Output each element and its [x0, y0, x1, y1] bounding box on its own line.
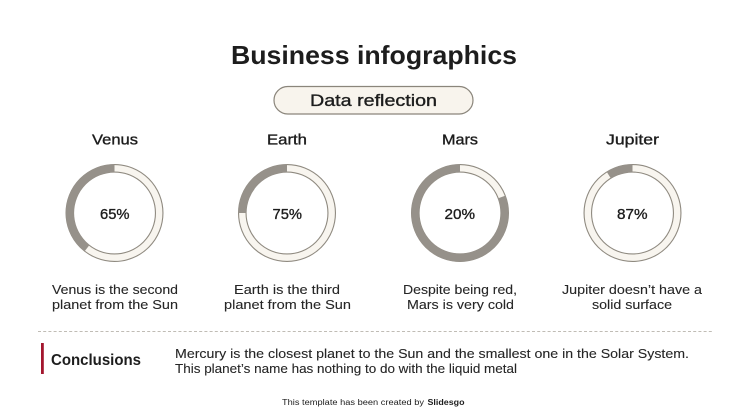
- description: Earth: planet from the Sun: [224, 297, 351, 312]
- donut chart: Venus 65%: 65%: [100, 206, 130, 223]
- heading: conclusions: Conclusions: [51, 352, 141, 369]
- conclusions text: This planet’s name has nothing to do with the liquid metal: [175, 361, 517, 376]
- subtitle pill: Data reflection: [310, 92, 437, 110]
- donut chart: Mars 20%: 20%: [444, 206, 475, 223]
- donut chart: Mars 20%: [415, 168, 505, 258]
- description: Mars: Despite being red,: [403, 282, 517, 297]
- heading: Earth: Earth: [267, 132, 307, 148]
- panel: Venus: [52, 132, 178, 312]
- description: Venus: Venus is the second: [52, 282, 178, 297]
- donut chart: Jupiter 87%: [588, 168, 677, 258]
- panel: conclusions: [41, 343, 689, 376]
- accent bar: [41, 343, 44, 374]
- panel: Jupiter: [562, 132, 703, 312]
- donut chart: Jupiter 87%: 87%: [617, 206, 648, 223]
- description: Jupiter: solid surface: [592, 297, 672, 312]
- footer credit: Slidesgo: [428, 398, 465, 407]
- footer credit: [282, 398, 465, 407]
- description: Venus: [52, 282, 178, 312]
- panel: Mars: [403, 132, 517, 312]
- description: Earth: Earth is the third: [234, 282, 340, 297]
- footer credit: This template has been created by: [282, 398, 424, 407]
- donut chart: Venus 65%: [70, 168, 159, 258]
- description: Mars: [403, 282, 517, 312]
- panel: Earth: [224, 132, 351, 312]
- description: Earth: [224, 282, 351, 312]
- donut chart: Earth 75%: 75%: [272, 206, 302, 223]
- description: Jupiter: Jupiter doesn’t have a: [562, 282, 703, 297]
- heading: Jupiter: Jupiter: [606, 132, 659, 148]
- subtitle pill: [274, 86, 473, 114]
- title: Business infographics: [231, 40, 517, 70]
- conclusions text: [175, 346, 689, 376]
- description: Jupiter: [562, 282, 703, 312]
- donut chart: Earth 75%: [242, 168, 332, 258]
- description: Mars: Mars is very cold: [407, 297, 514, 312]
- heading: Mars: Mars: [442, 132, 478, 148]
- description: Venus: planet from the Sun: [52, 297, 178, 312]
- heading: Venus: Venus: [92, 132, 138, 148]
- conclusions text: Mercury is the closest planet to the Sun and the smallest one in the Solar System.: [175, 346, 689, 361]
